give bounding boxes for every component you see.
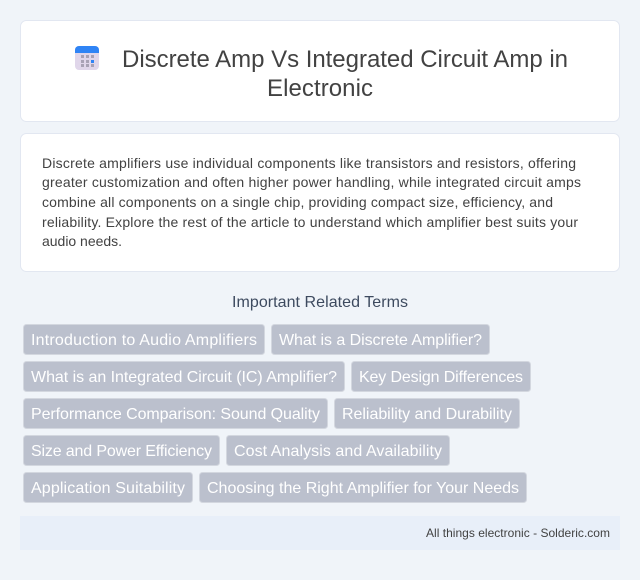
footer bar xyxy=(20,516,620,550)
footer text: All things electronic - Solderic.com xyxy=(426,526,610,540)
heading: important related terms: Important Related Terms xyxy=(232,294,408,311)
tag: choosing the right amplifier: Choosing the Right Amplifier for Your Needs xyxy=(207,480,519,497)
tag: application suitability: Application Suitability xyxy=(31,480,185,497)
summary text: audio needs. xyxy=(42,233,122,249)
panel: title card xyxy=(20,20,620,122)
tag: size and power: Size and Power Efficiency xyxy=(31,443,212,460)
summary text: greater customization and often higher power handling, while integrated circuit amps xyxy=(42,174,581,190)
icon: calendar xyxy=(75,46,99,70)
tag: integrated circuit amplifier: What is an Integrated Circuit (IC) Amplifier? xyxy=(31,369,337,386)
tag: size and power xyxy=(24,436,220,466)
summary text: combine all components on a single chip, providing compact size, efficiency, and xyxy=(42,194,553,210)
summary text xyxy=(42,155,581,249)
tag: performance comparison xyxy=(24,398,328,428)
title xyxy=(122,46,568,102)
tag: cost analysis: Cost Analysis and Availability xyxy=(234,443,442,460)
tag: introduction: Introduction to Audio Amplifiers xyxy=(31,332,257,349)
summary text: reliability. Explore the rest of the article to understand which amplifier best suits your xyxy=(42,214,578,230)
tag: integrated circuit amplifier xyxy=(24,362,344,392)
tag: performance comparison: Performance Comparison: Sound Quality xyxy=(31,406,320,423)
title: Electronic xyxy=(267,75,373,102)
tag: introduction xyxy=(24,324,264,354)
tag: discrete amplifier: What is a Discrete Amplifier? xyxy=(279,332,482,349)
tag: application suitability xyxy=(24,472,192,502)
tag: design differences xyxy=(352,362,530,392)
tag: discrete amplifier xyxy=(272,324,490,354)
tag: cost analysis xyxy=(226,436,450,466)
tag: design differences: Key Design Differences xyxy=(359,369,523,386)
tag: reliability: Reliability and Durability xyxy=(342,406,512,423)
panel: summary xyxy=(20,134,620,272)
related term tags xyxy=(24,324,530,502)
title: Discrete Amp Vs Integrated Circuit Amp in xyxy=(122,46,568,73)
tag: choosing the right amplifier xyxy=(200,472,526,502)
summary text: Discrete amplifiers use individual components like transistors and resistors, offering xyxy=(42,155,576,171)
tag: reliability xyxy=(334,398,520,428)
